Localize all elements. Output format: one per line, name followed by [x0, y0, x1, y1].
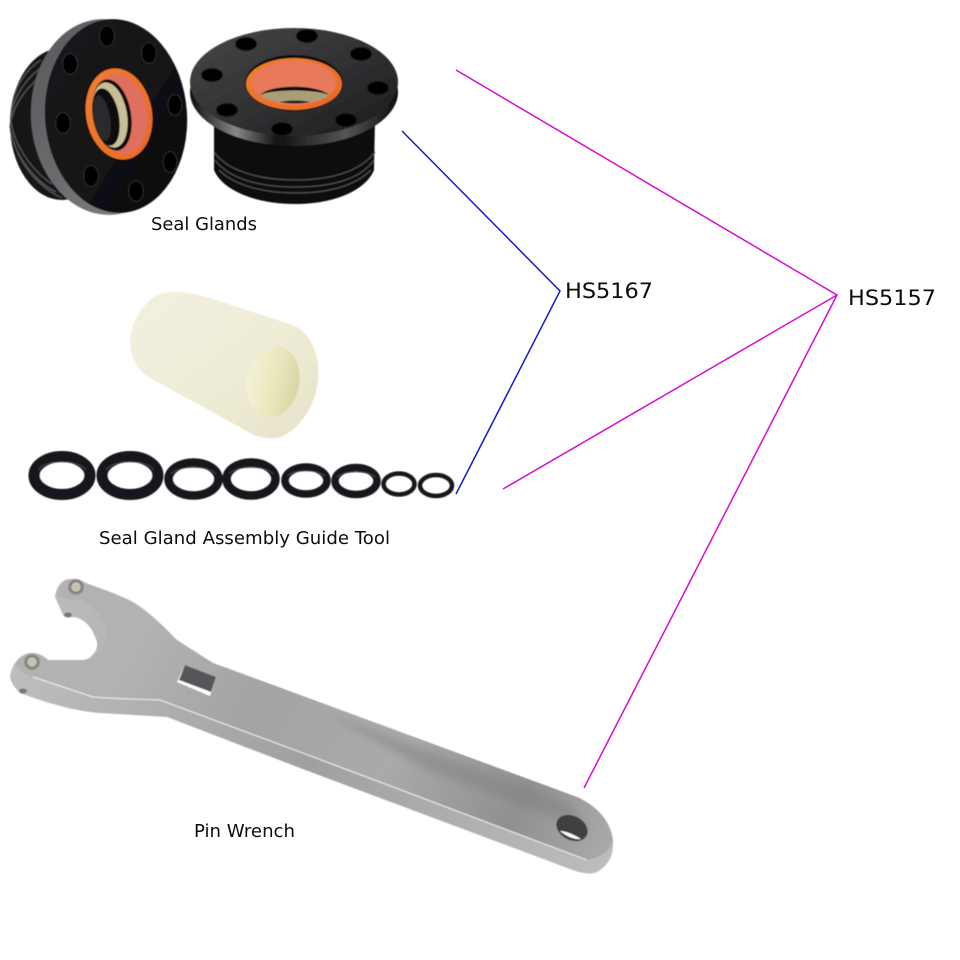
icon: O-rings	[34, 456, 452, 496]
flange rim	[190, 38, 398, 146]
flange face	[38, 14, 194, 218]
wrench silhouette and side edge	[10, 579, 613, 873]
wrench top face	[15, 579, 613, 860]
threads	[214, 118, 375, 204]
flange face	[190, 28, 398, 136]
label: Seal Gland Assembly Guide Tool: Seal Gland Assembly Guide Tool	[99, 529, 390, 549]
icon: pin wrench	[10, 579, 613, 873]
orange seal	[245, 55, 343, 111]
icon: nylon assembly guide tool	[130, 292, 319, 438]
bolt holes	[202, 30, 388, 136]
callout lines: HS5167	[402, 131, 560, 494]
flange rim	[24, 14, 188, 220]
end hole	[552, 810, 592, 846]
bolt holes	[56, 26, 182, 202]
callout lines: HS5157	[456, 70, 837, 788]
ring highlights	[38, 462, 375, 477]
tool bore	[240, 341, 306, 423]
label: Pin Wrench: Pin Wrench	[194, 822, 295, 842]
label: HS5167: HS5167	[565, 279, 653, 304]
shaded top of handle	[330, 715, 590, 830]
label: HS5157: HS5157	[848, 286, 936, 311]
face edge highlight	[33, 677, 587, 860]
label: Seal Glands: Seal Glands	[151, 215, 257, 235]
pins	[19, 579, 84, 694]
square slot	[177, 665, 216, 696]
tool body	[130, 292, 319, 438]
icon: right seal gland	[190, 28, 398, 204]
orange seal	[77, 62, 161, 166]
threaded body	[10, 48, 114, 200]
icon: left seal gland	[10, 14, 194, 220]
